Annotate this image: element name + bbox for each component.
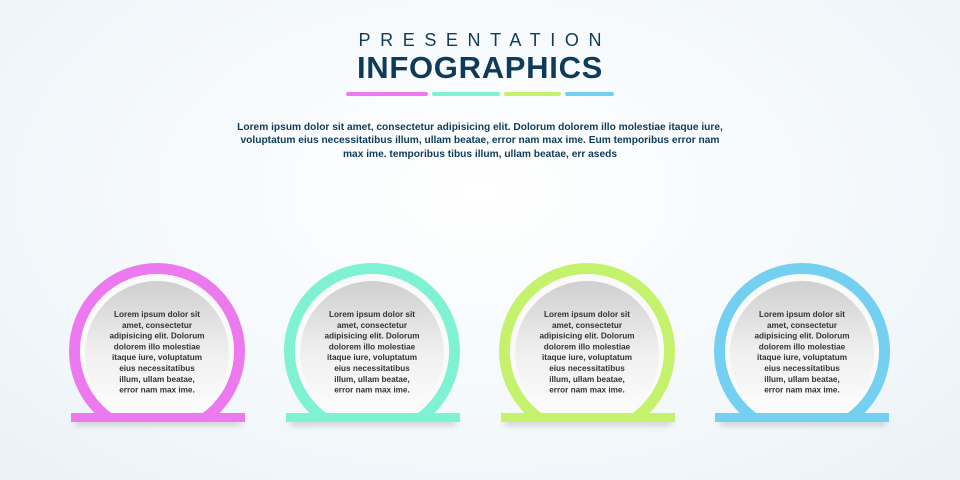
panel 3: green: amet, consectetur (552, 321, 623, 330)
panel 1: pink: itaque iure, voluptatum (112, 353, 202, 362)
intro paragraph: Lorem ipsum dolor sit amet, consectetur adipisicing elit. Dolorum dolorem illo molestiae itaque iure, voluptatum eius necessitatibus illum, ullam beatae, error nam max ime. Eum temporibus error nam max ime. temporibus tibus illum, ullam beatae, err aseds (237, 122, 723, 160)
panel 1: pink: dolorem illo molestiae (114, 342, 201, 351)
panel 4: blue: Lorem ipsum dolor sit (759, 310, 845, 319)
panel 1: pink (71, 268, 245, 434)
subtitle: presentation: PRESENTATION (359, 30, 611, 50)
panel 2: teal: illum, ullam beatae, (334, 375, 410, 384)
panel 3: green (501, 268, 675, 434)
panel 4: blue: dolorem illo molestiae (759, 342, 846, 351)
panel 3: green: adipisicing elit. Dolorum (539, 332, 635, 341)
panel 4: blue: adipisicing elit. Dolorum (754, 332, 850, 341)
color underline bars (346, 92, 614, 96)
panel 2: teal (286, 268, 460, 434)
panel 2: teal: adipisicing elit. Dolorum (324, 332, 420, 341)
panel 3: green: dolorem illo molestiae (544, 342, 631, 351)
panel 1: pink: illum, ullam beatae, (119, 375, 195, 384)
panel 2: teal: itaque iure, voluptatum (327, 353, 417, 362)
panel 1: pink: adipisicing elit. Dolorum (109, 332, 205, 341)
panel 4: blue (715, 268, 889, 434)
panel 3: green: illum, ullam beatae, (549, 375, 625, 384)
panel 4: blue: amet, consectetur (767, 321, 838, 330)
panel 2: teal: error nam max ime. (334, 386, 410, 395)
panel 3: green: eius necessitatibus (549, 364, 625, 373)
panel 1: pink: amet, consectetur (122, 321, 193, 330)
panel 1: pink: eius necessitatibus (119, 364, 195, 373)
panel 1: pink: error nam max ime. (119, 386, 195, 395)
panel 3: green: error nam max ime. (549, 386, 625, 395)
title: infographics: INFOGRAPHICS (357, 50, 603, 85)
panel 3: green: Lorem ipsum dolor sit (544, 310, 630, 319)
panel 2: teal: eius necessitatibus (334, 364, 410, 373)
panel 2: teal: Lorem ipsum dolor sit (329, 310, 415, 319)
panel 4: blue: illum, ullam beatae, (764, 375, 840, 384)
panel 4: blue: eius necessitatibus (764, 364, 840, 373)
panel 2: teal: amet, consectetur (337, 321, 408, 330)
four circle panels (69, 263, 890, 428)
panel 3: green: itaque iure, voluptatum (542, 353, 632, 362)
panel 1: pink: Lorem ipsum dolor sit (114, 310, 200, 319)
panel 4: blue: error nam max ime. (764, 386, 840, 395)
panel 2: teal: dolorem illo molestiae (329, 342, 416, 351)
panel 4: blue: itaque iure, voluptatum (757, 353, 847, 362)
